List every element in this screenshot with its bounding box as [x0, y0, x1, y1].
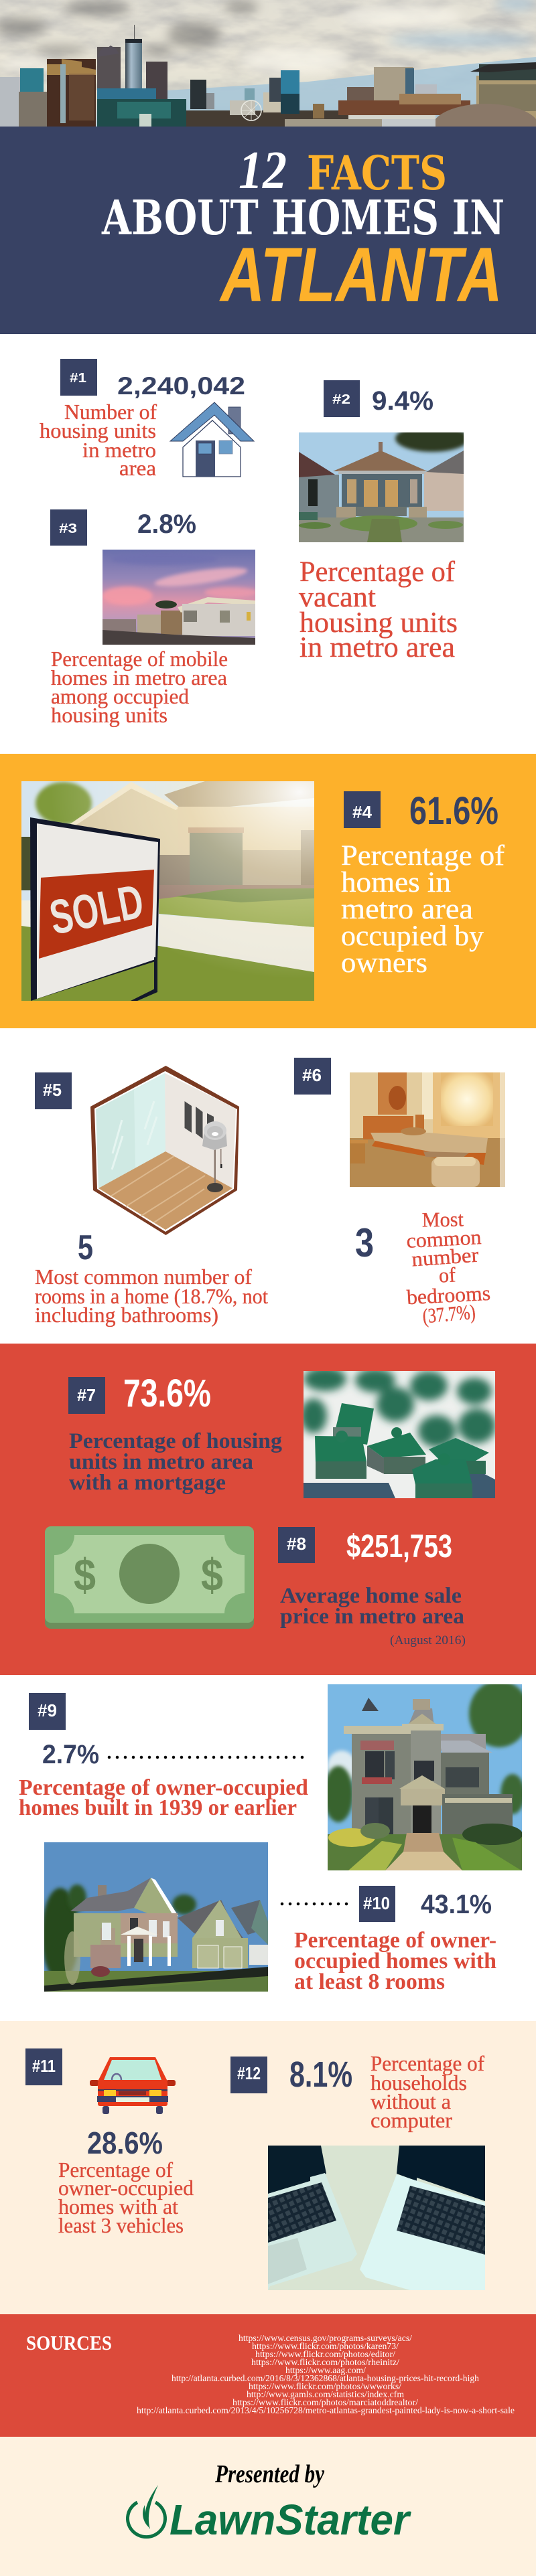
panel: fact 6 [294, 1058, 505, 1327]
description: bedrooms: number [411, 1243, 480, 1271]
description: vacant housing: housing units [299, 607, 458, 639]
photo: bedroom [350, 1072, 505, 1187]
stat: 61.6%: 61.6% [409, 789, 498, 833]
description: bedrooms: common [406, 1225, 482, 1253]
panel: fact 4 [0, 754, 536, 1028]
description: older homes: homes built in 1939 or earlier [19, 1795, 297, 1820]
description: bedrooms: bedrooms [406, 1281, 491, 1309]
description: computer [371, 2051, 484, 2132]
description: vehicles [58, 2158, 194, 2237]
description: vehicles: owner-occupied [58, 2176, 194, 2200]
description: rooms: including bathrooms) [35, 1303, 218, 1327]
panel: fact 3 [50, 509, 258, 727]
description: housing units: area [119, 456, 156, 480]
badge label #12: #12 [237, 2063, 261, 2083]
photo: green toy houses [300, 1367, 496, 1498]
description: sale price [280, 1584, 464, 1629]
description: mobile homes: housing units [51, 703, 168, 727]
icon: red car [90, 2057, 176, 2114]
description: housing units: Number of [64, 400, 157, 424]
description: bedrooms: (37.7%) [421, 1300, 476, 1327]
description: eight rooms: Percentage of owner- [294, 1928, 496, 1953]
description: vacant housing: vacant [299, 582, 376, 613]
description: computer: households [371, 2071, 467, 2095]
badge label #5: #5 [43, 1080, 62, 1100]
panel: facts 11 and 12 [0, 2021, 536, 2314]
description: owner occupied: occupied by [341, 920, 484, 952]
stat: 9.4%: 9.4% [372, 386, 433, 416]
list of source URLs: https://www.flickr.com/photos/editor/ [255, 2350, 395, 2360]
title: FACTS: FACTS [307, 145, 447, 201]
photo: sold sign in front of a home [21, 781, 314, 1001]
illustration: isometric room [90, 1066, 239, 1235]
list of source URLs: https://www.flickr.com/photos/marciatoddrealtor/ [232, 2398, 418, 2408]
description: owner occupied: homes in [341, 867, 451, 898]
photo: Atlanta skyline [0, 0, 536, 127]
description: mortgage: with a mortgage [69, 1471, 226, 1495]
list of source URLs: https://www.aag.com/ [285, 2366, 366, 2376]
description: housing units [40, 400, 157, 480]
photo: large suburban house [42, 1842, 268, 1992]
illustration: dollar bill: $ [201, 1550, 223, 1601]
panel: fact 9 [19, 1680, 529, 1870]
description: mortgage: units in metro area [69, 1450, 253, 1474]
dotted connector [282, 1903, 348, 1905]
stat: 5: 5 [78, 1228, 93, 1267]
list of source URLs: https://www.census.gov/programs-surveys/acs/ [239, 2334, 412, 2344]
badge #12 [230, 2057, 267, 2093]
description: owner occupied [341, 840, 505, 979]
sold text: SOLD [46, 874, 147, 945]
logo: LawnStarter: LawnStarter [170, 2496, 411, 2544]
description: vacant housing [299, 556, 458, 663]
stat: 8.1%: 8.1% [289, 2055, 352, 2095]
panel: sources [0, 2314, 536, 2437]
panel: fact 10 [42, 1842, 496, 1994]
list of source URLs: http://www.gamls.com/statistics/index.cfm [247, 2390, 404, 2400]
text: Presented by: Presented by [214, 2460, 324, 2488]
stat: 43.1%: 43.1% [421, 1890, 492, 1919]
badge #4 [344, 791, 381, 828]
photo: mobile homes at dusk [102, 550, 258, 645]
dotted connector [109, 1756, 303, 1759]
description: computer: computer [371, 2108, 452, 2132]
badge label #3: #3 [59, 521, 77, 536]
description: eight rooms [294, 1928, 496, 1994]
description: mobile homes: homes in metro area [51, 665, 227, 690]
description: vehicles: least 3 vehicles [58, 2213, 184, 2237]
description: owner occupied: metro area [341, 894, 473, 925]
description: owner occupied: Percentage of [341, 840, 505, 872]
stat: 3: 3 [355, 1220, 374, 1265]
photo: Victorian painted lady house [324, 1680, 529, 1870]
badge label #2: #2 [332, 392, 350, 407]
description: mobile homes: Percentage of mobile [51, 647, 228, 671]
list of source URLs: http://atlanta.curbed.com/2016/8/3/12362868/atlanta-housing-prices-hit-record-high [172, 2374, 479, 2384]
badge label #7: #7 [77, 1385, 96, 1405]
badge label #4: #4 [352, 802, 373, 822]
description: sale price: price in metro area [280, 1605, 464, 1629]
description: computer: without a [371, 2089, 451, 2113]
description: vehicles: homes with at [58, 2194, 178, 2219]
list of source URLs [137, 2334, 515, 2416]
panel: facts 7 and 8 [0, 1344, 536, 1675]
description: mobile homes [51, 647, 228, 727]
list of source URLs: https://www.flickr.com/photos/karen73/ [252, 2342, 399, 2352]
photo: boarded-up vacant house [299, 425, 469, 542]
logo: LawnStarter [127, 2485, 411, 2544]
stat: 73.6%: 73.6% [123, 1372, 211, 1415]
description: vacant housing: in metro area [299, 632, 455, 663]
description: rooms [35, 1265, 268, 1327]
list of source URLs: https://www.flickr.com/photos/rheinitz/ [251, 2358, 399, 2368]
description: mortgage [69, 1429, 283, 1495]
stat: 2,240,042: 2,240,042 [117, 372, 245, 400]
description: rooms: rooms in a home (18.7%, not [35, 1284, 268, 1308]
description: vehicles: Percentage of [58, 2158, 173, 2182]
badge label #8: #8 [287, 1534, 306, 1554]
panel: title banner [0, 127, 536, 334]
description: vacant housing: Percentage of [299, 556, 456, 588]
badge label #9: #9 [38, 1700, 57, 1720]
badge #11 [25, 2048, 62, 2085]
stat: 2.7%: 2.7% [42, 1740, 99, 1769]
badge label #10: #10 [363, 1893, 390, 1913]
description: housing units: in metro [82, 438, 156, 462]
description: computer: Percentage of [371, 2051, 484, 2075]
panel: fact 1 [40, 359, 254, 480]
description: owner occupied: owners [341, 947, 427, 979]
description: eight rooms: occupied homes with [294, 1949, 496, 1974]
title: 12: 12 [239, 141, 287, 200]
description: older homes [19, 1775, 308, 1820]
stat: $251,753: $251,753 [346, 1529, 452, 1564]
description: bedrooms [406, 1207, 491, 1327]
description: eight rooms: at least 8 rooms [294, 1969, 445, 1994]
description: mortgage: Percentage of housing [69, 1429, 283, 1453]
description: sale price: Average home sale [280, 1584, 462, 1608]
illustration: dollar bill [45, 1526, 254, 1629]
badge label #11: #11 [32, 2056, 56, 2076]
badge #8 [278, 1527, 315, 1563]
note: August 2016: (August 2016) [390, 1633, 466, 1647]
description: rooms: Most common number of [35, 1265, 252, 1289]
description: bedrooms: of [438, 1263, 456, 1287]
description: bedrooms: Most [422, 1207, 464, 1232]
panel: fact 2 [299, 380, 469, 663]
badge #10 [359, 1886, 395, 1922]
badge label #6: #6 [302, 1065, 322, 1085]
photo: two laptops [268, 2146, 485, 2290]
list of source URLs: http://atlanta.curbed.com/2013/4/5/10256728/metro-atlantas-grandest-painted-lady-is-now-a-short-sale [137, 2406, 515, 2416]
description: housing units: housing units [40, 418, 156, 442]
badge #7 [68, 1377, 105, 1414]
badge label #1: #1 [70, 371, 86, 386]
description: mobile homes: among occupied [51, 684, 189, 708]
panel: footer [0, 2437, 536, 2576]
icon: house [170, 402, 254, 477]
illustration: dollar bill: $ [74, 1550, 96, 1601]
stat: 2.8%: 2.8% [137, 509, 196, 539]
panel: fact 5 [35, 1066, 268, 1327]
list of source URLs: https://www.flickr.com/photos/wwworks/ [249, 2382, 401, 2392]
stat: 28.6%: 28.6% [87, 2125, 163, 2160]
description: older homes: Percentage of owner-occupied [19, 1775, 308, 1800]
heading: sources: SOURCES [26, 2331, 112, 2354]
